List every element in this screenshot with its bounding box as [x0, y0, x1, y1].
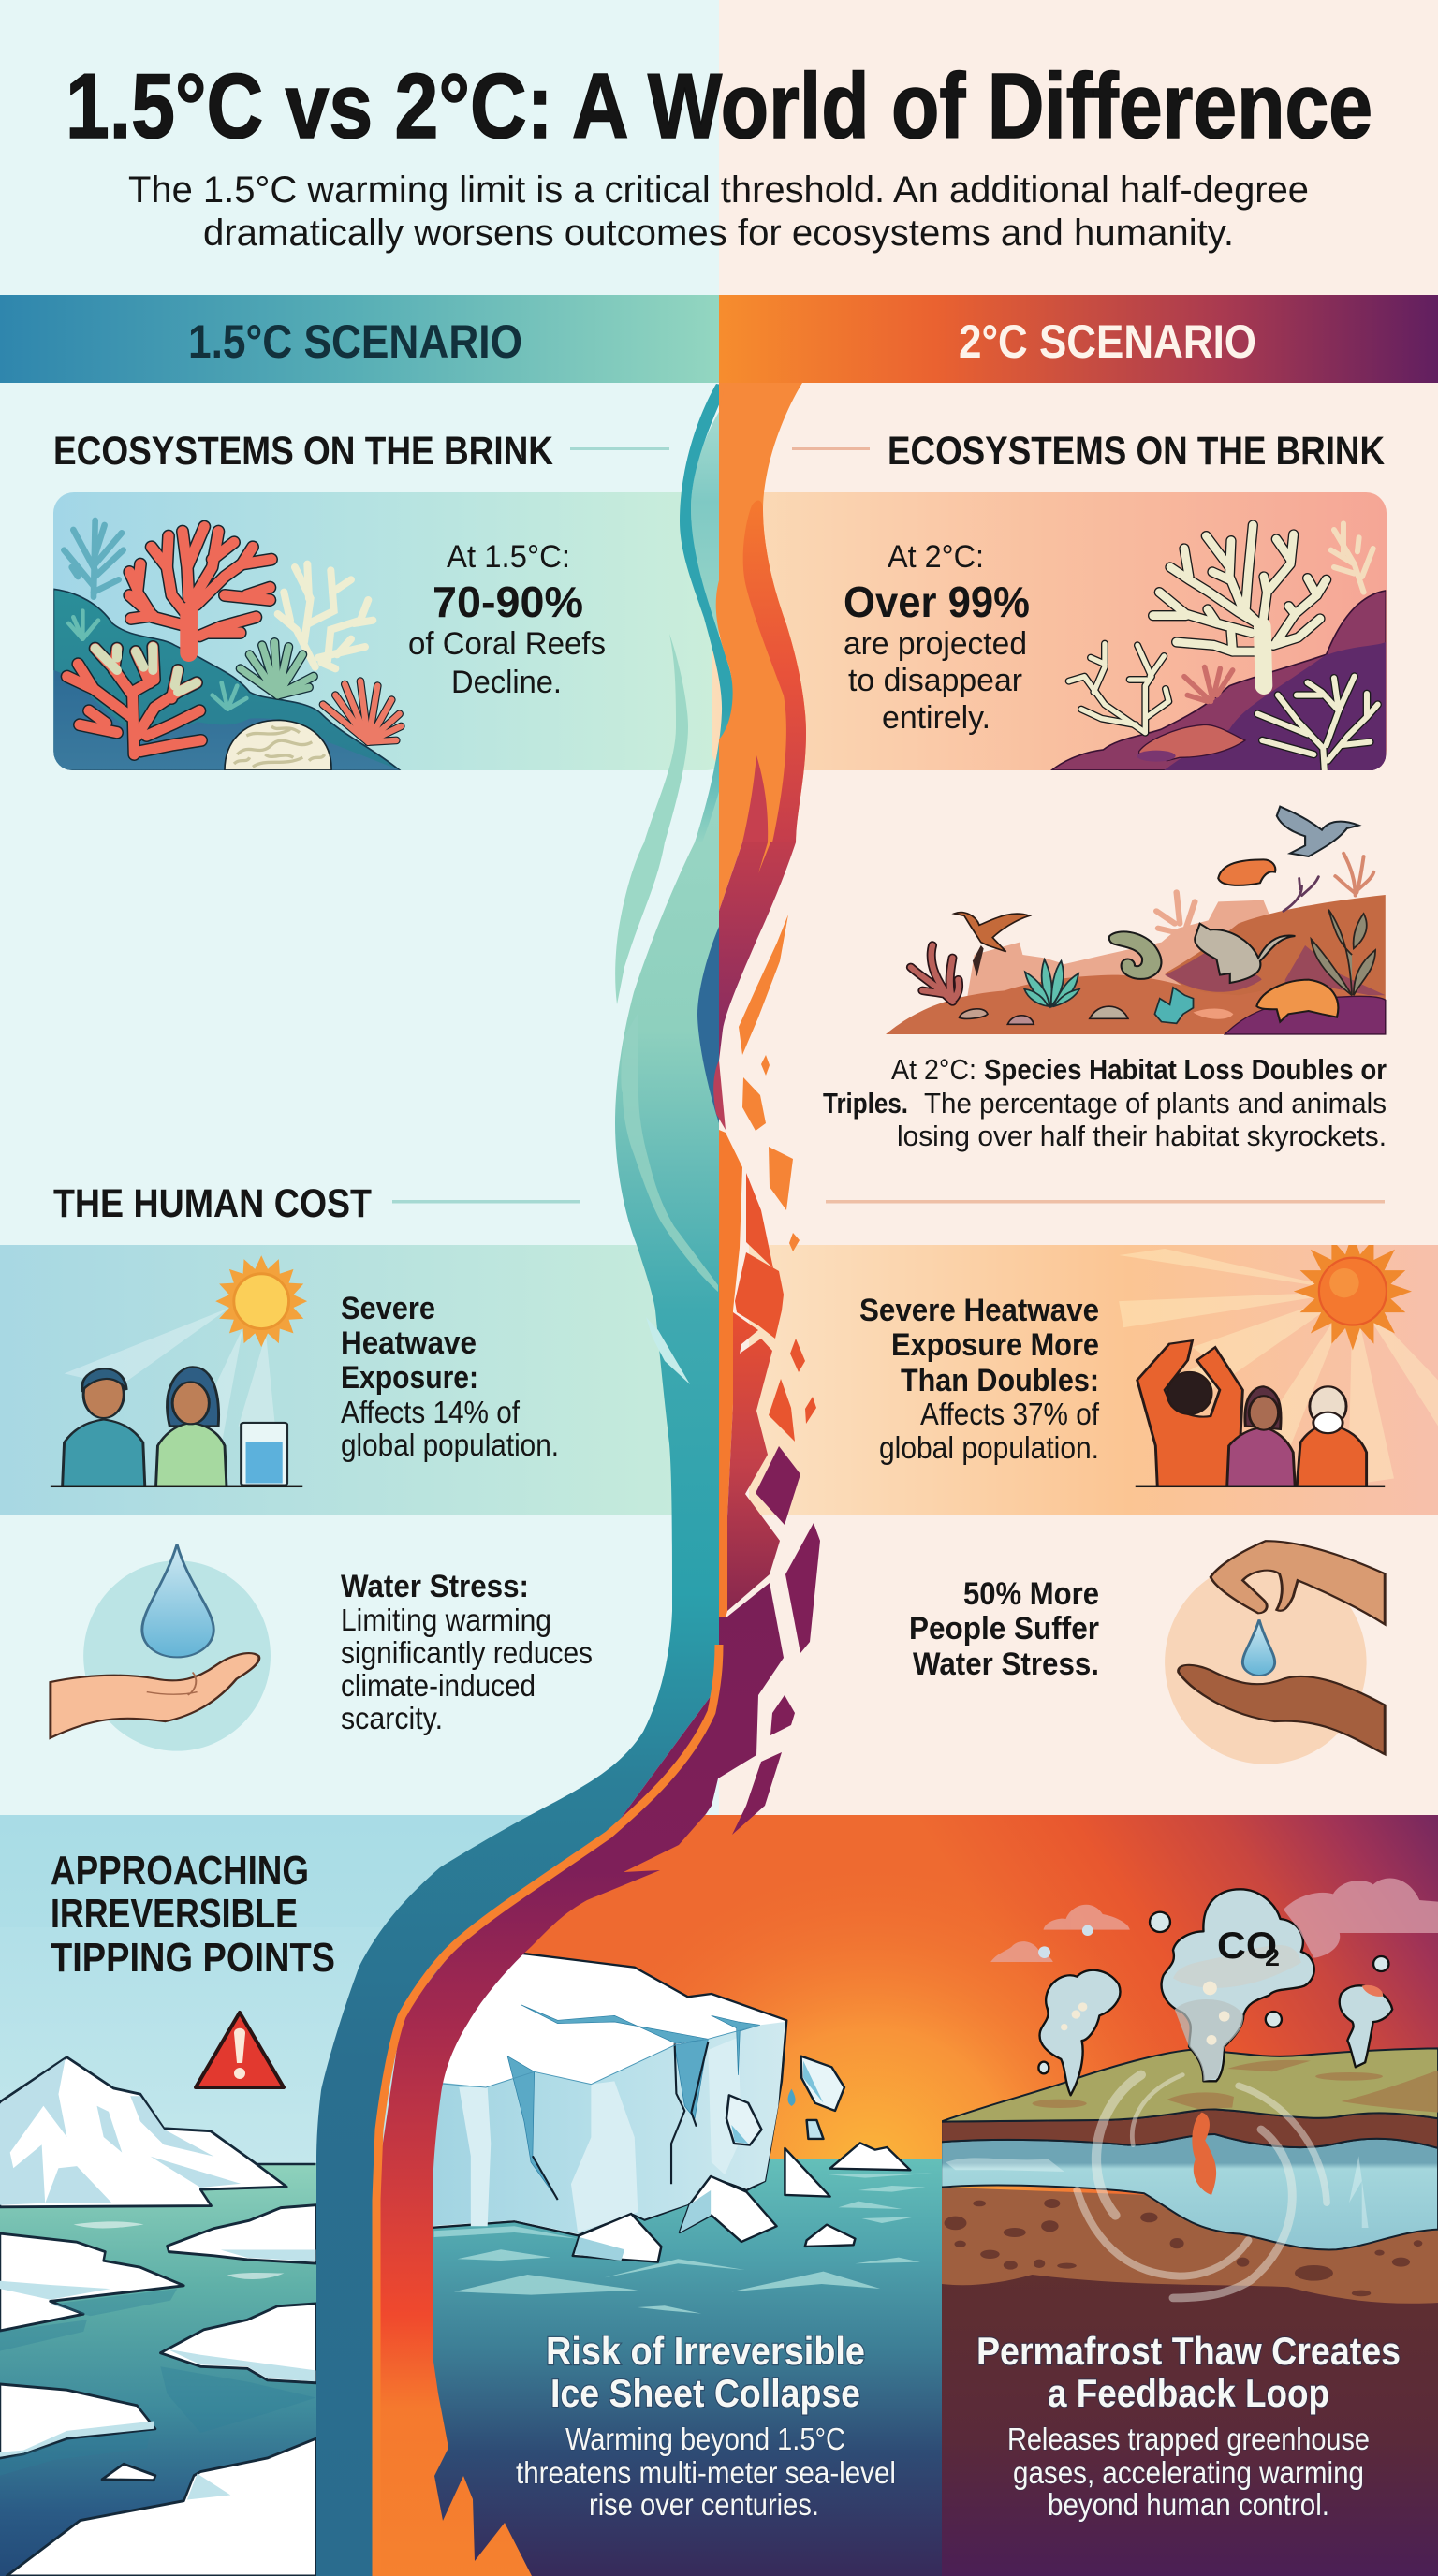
river: teal upper ribbon [680, 384, 734, 842]
text: 1.5°C coral statistic: At 1.5°C: [447, 539, 570, 575]
text: heatwave 2°C: Affects 37% of [920, 1397, 1100, 1431]
coral: red fan [323, 681, 401, 742]
text: heatwave 2°C: Exposure More [891, 1327, 1099, 1363]
river: shattered shards [732, 915, 820, 1835]
text: permafrost thaw: Permafrost Thaw Creates [976, 2329, 1401, 2373]
text: heatwave 2°C [859, 1293, 1100, 1465]
heading: ecosystems left: ECOSYSTEMS ON THE BRINK [53, 429, 553, 474]
text: 2°C coral statistic: At 2°C: [888, 539, 984, 575]
illustration: sea [426, 2159, 942, 2576]
heading: tipping points [51, 1848, 335, 1981]
text: ice sheet collapse: Risk of Irreversible [546, 2329, 865, 2373]
icon: warning triangle [196, 2012, 284, 2087]
coral: lower left [67, 647, 201, 754]
text: heatwave 1.5°C: Heatwave [341, 1325, 477, 1361]
header band: 2°C scenario: 2°C SCENARIO [959, 315, 1256, 368]
person: with mask [1297, 1386, 1367, 1486]
illustration: iceberg and melting floes [0, 2057, 315, 2576]
text: permafrost thaw: Releases trapped greenhouse [1007, 2422, 1370, 2456]
ice layer [941, 2134, 1438, 2249]
text: water stress 2°C [909, 1576, 1099, 1682]
sunset glow [433, 1815, 1438, 2576]
label: CO2 in cloud: CO [1217, 1925, 1277, 1967]
text: heatwave 1.5°C: Affects 14% of [341, 1395, 521, 1429]
text: species habitat loss: losing over half their habitat skyrockets. [897, 1120, 1387, 1152]
river: cracked orange strip and red body [719, 1130, 780, 1645]
heading: tipping points: APPROACHING [51, 1848, 309, 1894]
text: heatwave 2°C: Than Doubles: [901, 1363, 1099, 1398]
coral: brain coral [225, 720, 331, 770]
soil layer with stones [941, 2188, 1438, 2304]
text: heatwave 1.5°C [341, 1291, 559, 1462]
plant: pink [911, 945, 959, 1002]
river: purple to orange band wrapping the ice panel [374, 1583, 784, 2576]
text: heatwave 1.5°C: global population. [341, 1427, 559, 1462]
river: orange and red 2°C flow [697, 383, 806, 1130]
animal: orange creature [1218, 859, 1275, 886]
river: mint blades [615, 634, 718, 1384]
panel: coral 1.5°C [53, 492, 727, 770]
background: 2°C side [719, 0, 1438, 2576]
tundra surface [941, 2048, 1438, 2122]
person: man [63, 1368, 145, 1486]
stones [960, 1006, 1128, 1024]
text: 2°C coral statistic [844, 539, 1030, 736]
plant: twig [1284, 877, 1318, 911]
illustration: species habitat [886, 807, 1386, 1034]
gas plumes [1040, 1889, 1392, 2095]
subtitle: dramatically worsens outcomes for ecosystems and humanity. [203, 212, 1234, 254]
feedback loop arcs [1077, 2075, 1327, 2298]
subtitle [128, 169, 1309, 254]
panel: water stress 1.5°C [51, 1544, 593, 1751]
background: 1.5°C side [0, 0, 719, 2576]
illustration: sun and distressed people [1119, 1233, 1438, 1487]
illustration: collapsing ice sheet [420, 1954, 932, 2314]
text: ice sheet collapse [516, 2329, 896, 2522]
tipping points: 1.5°C side scene [0, 1815, 599, 2576]
floes [0, 2205, 315, 2576]
coral: small bleached left [1069, 644, 1168, 733]
animal: grey bird [1277, 807, 1358, 856]
heading: the human cost [53, 1181, 580, 1226]
coral: green anemone [241, 642, 314, 695]
deep soil base [942, 2265, 1438, 2576]
animal: grey mouse [1195, 924, 1295, 983]
header band: 2°C scenario [719, 295, 1438, 383]
clouds [990, 1905, 1130, 1962]
text: water stress 1.5°C: climate-induced [341, 1668, 536, 1703]
floating ice chunks [573, 2056, 910, 2262]
text: permafrost thaw: beyond human control. [1048, 2487, 1329, 2522]
text: 1.5°C coral statistic: 70-90% [433, 578, 583, 626]
text: 1.5°C coral statistic: of Coral Reefs [408, 626, 606, 662]
river: teal 1.5°C flow [316, 768, 719, 2576]
text: water stress 1.5°C: significantly reduces [341, 1635, 593, 1670]
text: permafrost thaw [976, 2329, 1401, 2522]
text: species habitat loss: At 2°C: [891, 1053, 976, 1086]
text: water stress 1.5°C: scarcity. [341, 1701, 443, 1735]
sea waves [454, 2174, 932, 2314]
header band: 1.5°C scenario: 1.5°C SCENARIO [188, 315, 522, 368]
coral: large red [129, 527, 271, 653]
divider: human cost right [826, 1200, 1385, 1204]
text: ice sheet collapse: Ice Sheet Collapse [550, 2371, 860, 2415]
text: 2°C coral statistic: Over 99% [844, 578, 1030, 626]
text: heatwave 1.5°C: Exposure: [341, 1360, 478, 1396]
text: ice sheet collapse: threatens multi-meter sea-level [516, 2455, 896, 2490]
text: 1.5°C coral statistic: Decline. [451, 665, 562, 700]
iceberg [0, 2057, 286, 2207]
coral: big bleached [1153, 525, 1327, 686]
text: species habitat loss [823, 1053, 1387, 1152]
illustration: healthy coral reef [53, 520, 401, 770]
active layer [941, 2109, 1438, 2148]
text: heatwave 1.5°C: Severe [341, 1291, 435, 1326]
heading: the human cost: THE HUMAN COST [53, 1181, 372, 1226]
text: ice sheet collapse: rise over centuries. [589, 2487, 819, 2522]
text: species habitat loss: Species Habitat Loss Doubles or [984, 1053, 1387, 1086]
lava thaw plume [1192, 2113, 1216, 2195]
text: heatwave 2°C: global population. [879, 1430, 1099, 1465]
plant: olive leaves [1312, 910, 1375, 995]
icon: water glass [242, 1423, 287, 1486]
text: species habitat loss: The percentage of plants and animals [924, 1087, 1387, 1120]
animal: chameleon [1109, 931, 1161, 979]
panel: heatwave 2°C [749, 1233, 1438, 1515]
illustration: hand dropping water [1165, 1541, 1385, 1764]
panel: water stress 2°C [909, 1541, 1385, 1764]
heading: tipping points: IRREVERSIBLE [51, 1891, 298, 1937]
label: CO2 in cloud: 2 [1265, 1943, 1280, 1971]
panel: coral 2°C [712, 492, 1387, 773]
text: permafrost thaw: gases, accelerating warming [1013, 2455, 1364, 2490]
text: water stress 2°C: People Suffer [909, 1611, 1099, 1647]
text: species habitat loss: Triples. [823, 1087, 908, 1120]
text: water stress 1.5°C [341, 1569, 593, 1735]
text: 2°C coral statistic: entirely. [882, 700, 990, 736]
illustration: permafrost layers [941, 1879, 1438, 2576]
animal: orange mole [1256, 980, 1338, 1022]
text: 2°C coral statistic: to disappear [848, 663, 1022, 698]
header band: 1.5°C scenario [0, 295, 719, 383]
coral: bleached lower right [1257, 677, 1378, 773]
heading: tipping points: TIPPING POINTS [51, 1935, 335, 1981]
text: water stress 1.5°C: Water Stress: [341, 1569, 529, 1604]
person: woman [1227, 1386, 1295, 1486]
person: woman [156, 1367, 227, 1486]
plant: teal agave [1024, 959, 1079, 1006]
text: 2°C coral statistic: are projected [844, 626, 1027, 662]
bubbles [1038, 1912, 1388, 2073]
text: heatwave 2°C: Severe Heatwave [859, 1293, 1099, 1328]
text: 1.5°C coral statistic [408, 539, 606, 700]
subtitle: The 1.5°C warming limit is a critical threshold. An additional half-degree [128, 169, 1309, 211]
panel: heatwave 1.5°C [0, 1245, 721, 1515]
animal: brown bird [954, 913, 1030, 952]
text: water stress 2°C: Water Stress. [913, 1647, 1099, 1682]
illustration: water drop above open hand [51, 1544, 271, 1751]
text: water stress 1.5°C: Limiting warming [341, 1603, 551, 1637]
illustration: bleached coral [1051, 523, 1386, 773]
text: permafrost thaw: a Feedback Loop [1048, 2371, 1329, 2415]
illustration: people, sun and water glass [51, 1255, 307, 1487]
plant: teal crystal [1154, 988, 1194, 1023]
text: ice sheet collapse: Warming beyond 1.5°C [565, 2422, 845, 2456]
person: hands on head [1137, 1340, 1242, 1486]
text: water stress 2°C: 50% More [963, 1576, 1099, 1612]
river: orange edge stripe [376, 1645, 719, 2576]
tipping points: 2°C side scene [420, 1815, 1438, 2576]
